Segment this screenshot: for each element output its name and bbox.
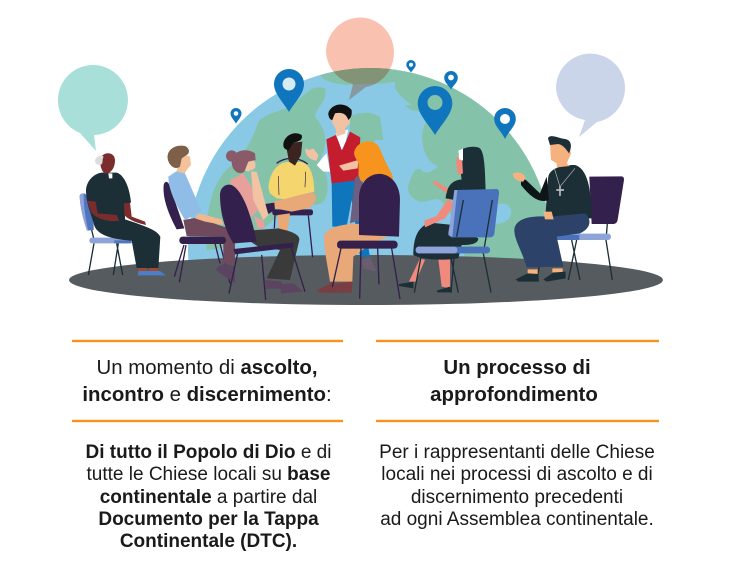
panel: left heading: Un momento di ascolto, [96,357,318,379]
text block: right description: ad ogni Assemblea continentale. [380,509,654,530]
person: woman with orange hair [317,141,400,299]
text block: left description: Di tutto il Popolo di Dio e di [86,442,331,463]
text block: right description [379,442,655,530]
person: priest on blue chair [80,153,166,275]
person: woman in black with blue chair [399,147,499,293]
location pins [230,60,516,139]
panel: right heading [376,340,659,422]
globe [188,68,546,260]
text block: right description: discernimento precedenti [411,487,623,508]
ground ellipse [69,255,663,305]
person: woman with bun [220,150,305,300]
person: man in light blue shirt [164,146,235,283]
speech bubble: periwinkle [556,54,625,137]
text block: left description: Documento per la Tappa [98,509,319,530]
text block: left description [86,442,331,552]
panel: right heading: approfondimento [430,384,598,406]
text block: left description: Continentale (DTC). [120,531,297,552]
speech bubble: salmon [326,18,394,100]
text block: right description: locali nei processi di ascolto e di [381,464,653,485]
panel: right heading: Un processo di [443,357,591,379]
person: man with cross necklace [513,136,624,282]
text block: left description: tutte le Chiese locali su base [87,464,330,485]
text block: right description: Per i rappresentanti delle Chiese [379,442,655,463]
speech bubble: teal [58,65,128,151]
person: speaker in red vest [305,104,377,272]
person: young man in yellow sweater [265,133,316,257]
panel: left heading: incontro e discernimento: [82,384,332,406]
panel: left heading [72,340,343,422]
text block: left description: continentale a partire dal [100,487,317,508]
